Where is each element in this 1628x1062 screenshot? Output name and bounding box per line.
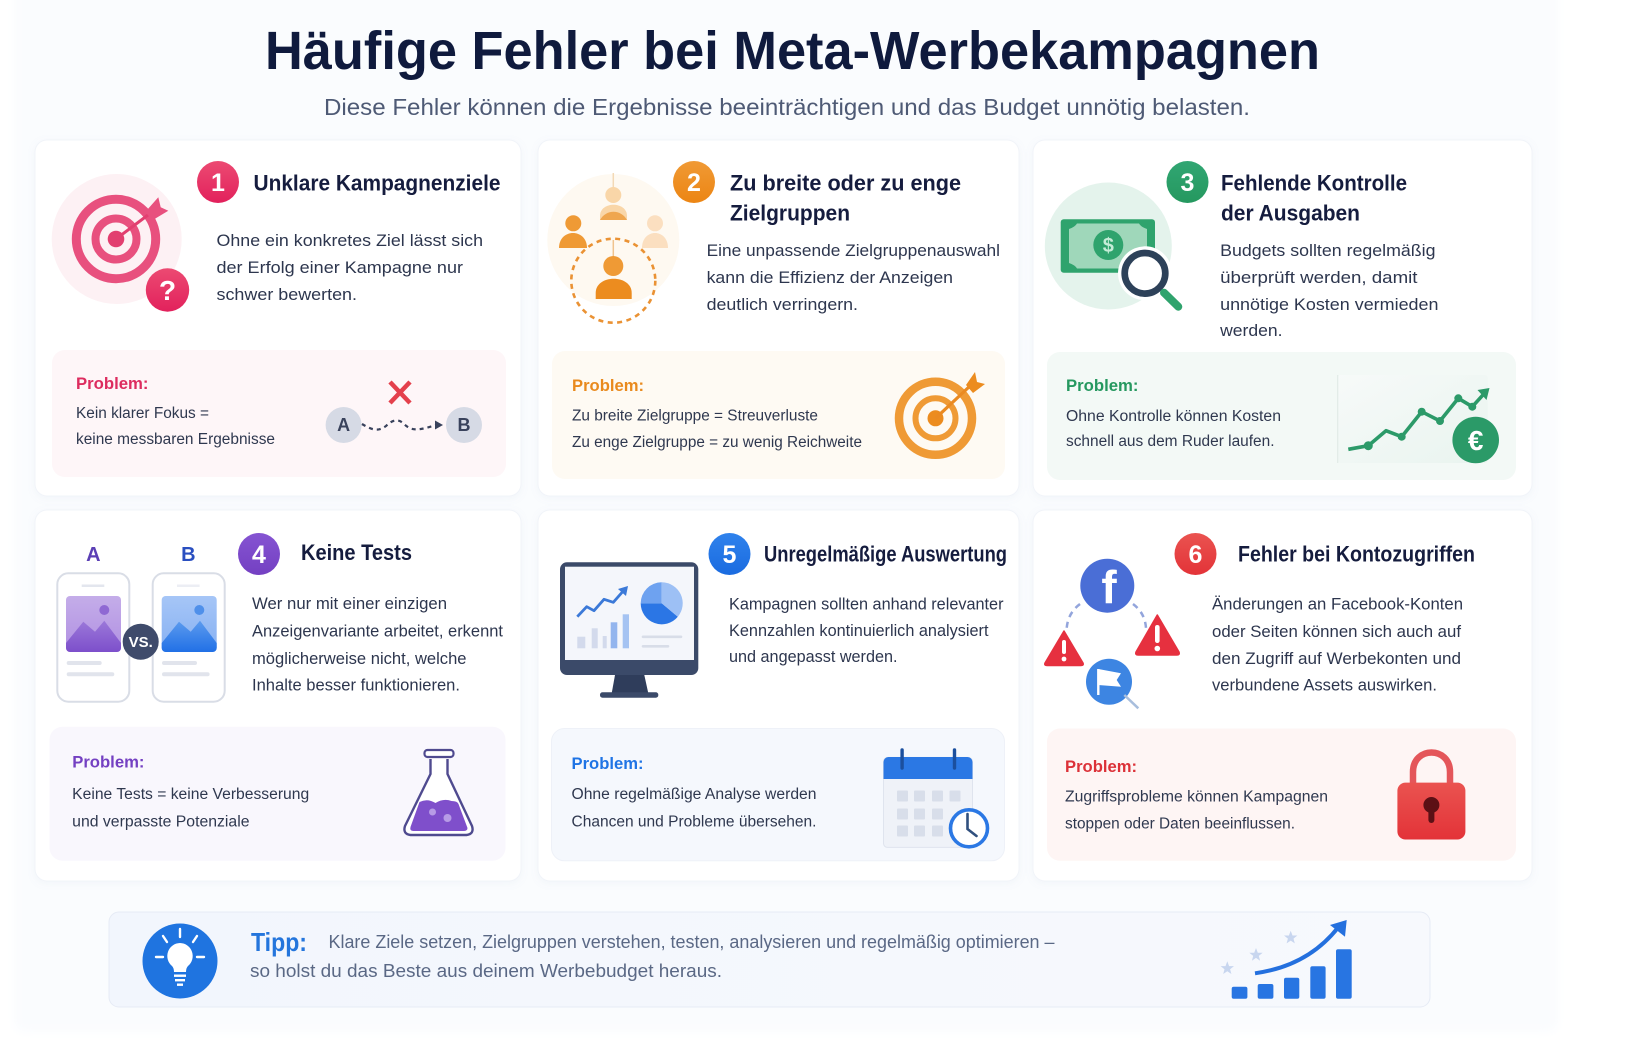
heading 3: Fehlende Kontrolle <box>1221 170 1407 196</box>
badge 5: 5 <box>723 541 737 569</box>
body text 1: der Erfolg einer Kampagne nur <box>216 258 463 277</box>
body text 2 <box>707 241 1000 314</box>
body text 4: Wer nur mit einer einzigen <box>252 594 447 613</box>
problem box 6: stoppen oder Daten beeinflussen. <box>1065 815 1295 832</box>
body text 3: Budgets sollten regelmäßig <box>1220 241 1436 260</box>
tip text: Klare Ziele setzen, Zielgruppen verstehen, testen, analysieren und regelmäßig optimieren – <box>328 932 1054 952</box>
icon: padlock <box>1397 752 1465 840</box>
icon: rising cost chart with euro: € <box>1468 425 1484 456</box>
heading 2: Zielgruppen <box>730 200 850 226</box>
problem box 3: Ohne Kontrolle können Kosten <box>1066 408 1281 425</box>
problem box 4: Problem: <box>72 752 144 772</box>
badge 3: 3 <box>1181 169 1194 197</box>
body text 4: Inhalte besser funktionieren. <box>252 676 460 695</box>
body text 5 <box>729 595 1004 666</box>
problem box 1: Kein klarer Fokus = <box>76 405 209 422</box>
problem box 2: Problem: <box>572 376 644 395</box>
body text 3: überprüft werden, damit <box>1220 268 1418 287</box>
problem box 4 <box>50 727 506 861</box>
icon: growth chart with stars <box>1221 920 1352 999</box>
problem box 6 <box>1047 728 1516 861</box>
body text 2: Eine unpassende Zielgruppenauswahl <box>707 241 1000 260</box>
icon: money with magnifier: $ <box>1103 235 1114 257</box>
badge 5 <box>708 533 750 575</box>
icon: A/B test phones: B <box>181 544 196 566</box>
body text 3 <box>1219 241 1438 340</box>
heading 1: Unklare Kampagnenziele <box>254 170 500 196</box>
tip text <box>250 932 1054 981</box>
title: Häufige Fehler bei Meta-Werbekampagnen <box>265 21 1320 81</box>
icon: A to B path with X: A <box>337 415 350 435</box>
body text 5: Kampagnen sollten anhand relevanter <box>729 595 1004 614</box>
body text 2: deutlich verringern. <box>707 295 858 314</box>
icon: light bulb <box>142 924 218 998</box>
problem box 2: Zu breite Zielgruppe = Streuverluste <box>572 408 818 425</box>
icon: target with question mark <box>52 174 189 312</box>
body text 5: und angepasst werden. <box>729 647 898 666</box>
body text 2: kann die Effizienz der Anzeigen <box>707 268 953 287</box>
panel: card 4 Keine Tests <box>35 510 521 881</box>
problem box 5: Chancen und Probleme übersehen. <box>572 814 816 830</box>
panel: card 2 Zielgruppen <box>538 140 1019 496</box>
icon: A/B test phones: A <box>86 544 101 566</box>
body text 1: schwer bewerten. <box>216 285 357 304</box>
icon: calendar with clock <box>884 750 988 847</box>
heading 3 <box>1221 170 1407 226</box>
body text 1: Ohne ein konkretes Ziel lässt sich <box>216 231 483 250</box>
icon: flask <box>404 750 473 835</box>
badge 1: 1 <box>211 169 225 197</box>
icon: orange target <box>899 372 985 455</box>
body text 6 <box>1212 595 1463 695</box>
badge 6 <box>1174 533 1216 575</box>
problem box 5 <box>552 728 1004 861</box>
heading 2 <box>730 170 961 226</box>
heading 6: Fehler bei Kontozugriffen <box>1238 542 1475 566</box>
problem box 2 <box>552 351 1005 479</box>
icon: Facebook account warnings: f <box>1101 561 1117 613</box>
icon: audience group <box>547 173 679 323</box>
icon: money with magnifier <box>1045 182 1178 310</box>
icon: monitor with charts <box>560 562 698 698</box>
icon: target with question mark: ? <box>159 275 176 306</box>
heading 5: Unregelmäßige Auswertung <box>764 542 1007 566</box>
badge 2: 2 <box>687 169 701 197</box>
body text 6: Änderungen an Facebook-Konten <box>1212 595 1463 614</box>
badge 3 <box>1166 161 1208 203</box>
problem box 5: Ohne regelmäßige Analyse werden <box>572 786 816 803</box>
badge 2 <box>673 161 715 203</box>
icon: A to B path with X: B <box>458 415 470 435</box>
icon: A/B test phones: VS. <box>129 634 153 651</box>
problem box 6: Zugriffsprobleme können Kampagnen <box>1065 789 1328 806</box>
problem box 5: Problem: <box>572 754 644 773</box>
badge 4 <box>238 533 280 575</box>
icon: A to B path with X <box>326 382 482 443</box>
problem box 4: und verpasste Potenziale <box>72 814 250 830</box>
panel: card 6 Kontozugriffe <box>1033 510 1532 881</box>
panel: card 5 Unregelmäßige Auswertung <box>538 510 1019 881</box>
icon: A/B test phones <box>57 544 225 702</box>
body text 3: unnötige Kosten vermieden <box>1220 295 1438 314</box>
problem box 1: Problem: <box>76 374 148 393</box>
icon: rising cost chart with euro <box>1338 375 1499 463</box>
panel: tip <box>109 912 1430 1007</box>
tip label: Tipp: <box>251 927 307 957</box>
body text 4: möglicherweise nicht, welche <box>252 649 466 668</box>
tip text: so holst du das Beste aus deinem Werbebudget heraus. <box>250 961 722 981</box>
heading 4: Keine Tests <box>301 540 412 565</box>
badge 1 <box>197 161 239 203</box>
body text 5: Kennzahlen kontinuierlich analysiert <box>729 621 989 640</box>
problem box 2: Zu enge Zielgruppe = zu wenig Reichweite <box>572 434 862 451</box>
heading 2: Zu breite oder zu enge <box>730 170 961 196</box>
body text 1 <box>216 231 483 304</box>
panel: card 1 Unklare Kampagnenziele <box>35 140 521 496</box>
heading 3: der Ausgaben <box>1221 200 1360 226</box>
body text 4 <box>252 594 503 695</box>
subtitle: Diese Fehler können die Ergebnisse beeinträchtigen und das Budget unnötig belasten. <box>324 94 1250 120</box>
panel: card 3 Fehlende Kontrolle <box>1033 140 1532 496</box>
body text 4: Anzeigenvariante arbeitet, erkennt <box>252 622 503 641</box>
problem box 1 <box>52 350 506 477</box>
problem box 4: Keine Tests = keine Verbesserung <box>72 786 309 803</box>
problem box 3: schnell aus dem Ruder laufen. <box>1066 433 1274 450</box>
problem box 1: keine messbaren Ergebnisse <box>76 431 275 448</box>
problem box 3 <box>1047 352 1516 480</box>
icon: Facebook account warnings <box>1045 559 1179 708</box>
badge 6: 6 <box>1189 541 1202 569</box>
badge 4: 4 <box>252 541 266 569</box>
problem box 3: Problem: <box>1066 376 1138 395</box>
body text 6: oder Seiten können sich auch auf <box>1212 622 1461 641</box>
body text 3: werden. <box>1219 321 1282 340</box>
body text 6: verbundene Assets auswirken. <box>1212 676 1437 695</box>
body text 6: den Zugriff auf Werbekonten und <box>1212 649 1461 668</box>
problem box 6: Problem: <box>1065 757 1137 776</box>
